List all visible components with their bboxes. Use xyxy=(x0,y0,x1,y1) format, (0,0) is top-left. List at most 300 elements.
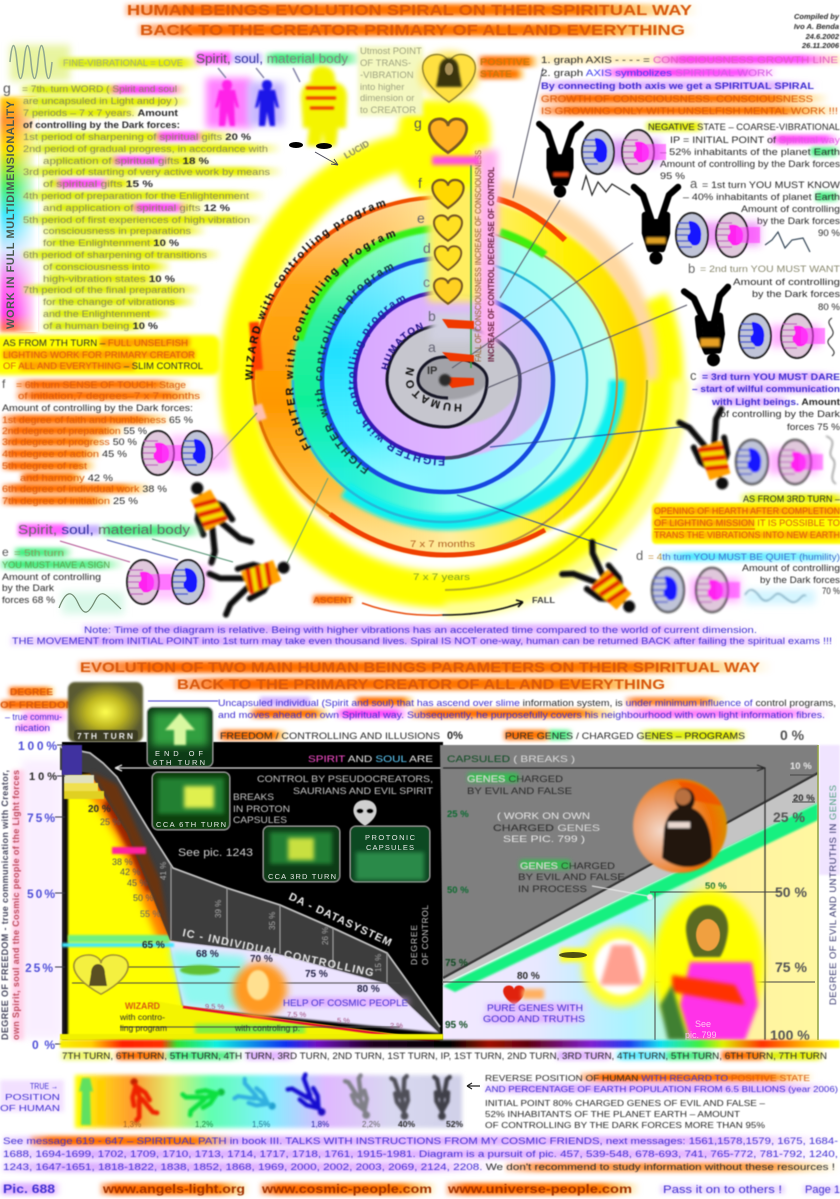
negative state text: – 52% inhabitants of the planet Earth xyxy=(660,147,840,158)
ring band f xyxy=(253,197,647,555)
utmost point text: OF TRANS- xyxy=(360,58,411,69)
upright rainbow figure xyxy=(79,1078,105,1125)
ring glow d xyxy=(345,380,617,522)
turn f text: of initiation,7 degrees–7 x 7 months xyxy=(18,391,200,402)
uncapsuled text: Uncapsuled individual (Spirit and soul) that has ascend over slime information system, is under minimum influence of control programs, xyxy=(218,698,836,709)
vertical freedom axis text: DEGREE OF FREEDOM - true communication with Creator, xyxy=(0,770,10,1040)
orange gradient edge xyxy=(90,775,170,940)
orange left band xyxy=(273,212,445,538)
turn f text: 7th degree of initiation 25 % xyxy=(2,496,139,507)
cyan glow xyxy=(170,950,245,1010)
utmost point text: into higher xyxy=(360,82,404,93)
woman portrait: See xyxy=(695,1019,711,1029)
dark datasystem band xyxy=(60,747,440,1033)
individual controlling label: IC - INDIVIDUAL CONTROLLING xyxy=(181,927,375,979)
wave e xyxy=(59,592,124,614)
periods text block g: are uncapsuled in Light and joy ) xyxy=(23,96,178,107)
turn c text: – start of wilful communication xyxy=(692,384,840,395)
messages paragraph: 1688, 1694-1699, 1702, 1709, 1710, 1713, 1714, 1717, 1718, 1761, 1915-1981. Diagram is a pursuit of pic. 457, 539-548, 678-693, 741, 765-772, 781-792, 1240, xyxy=(3,1149,838,1160)
left chart: black panel xyxy=(22,707,443,1042)
turn f text: 4th degree of action 45 % xyxy=(2,449,128,460)
chart percent labels xyxy=(445,761,815,1043)
positive state label: POSITIVE xyxy=(480,57,530,68)
negative state text: 95 % xyxy=(660,171,686,182)
reverse position text xyxy=(485,1073,838,1130)
dark red edge xyxy=(108,800,152,890)
title xyxy=(125,2,700,39)
curve percent labels: 55 % xyxy=(140,909,161,919)
band brown overlay xyxy=(92,772,170,938)
reverse position text: REVERSE POSITION OF HUMAN WITH REGARD TO POSITIVE STATE xyxy=(485,1073,810,1083)
turn d text: = 4th turn YOU MUST BE QUIET (humility) xyxy=(648,552,840,563)
degree of control label: OF CONTROL xyxy=(420,905,430,965)
right tick axis xyxy=(817,745,819,1040)
freedom and pure genes header: 0 % xyxy=(780,727,805,743)
figure d falling xyxy=(562,542,815,627)
label pointer lines xyxy=(218,68,300,82)
periods text block g: 7th period of the final preparation xyxy=(23,285,185,296)
photo: end of 6th turn: 6TH TURN xyxy=(153,758,205,767)
freedom and pure genes header: FREEDOM / CONTROLLING AND ILLUSIONS xyxy=(220,731,440,742)
chart percent labels: 100 % xyxy=(770,1027,810,1043)
turn a text: Amount of controlling xyxy=(741,204,840,215)
positive state label xyxy=(478,56,540,80)
curve percent labels: 50 % xyxy=(133,893,154,903)
ufo and angel xyxy=(559,927,658,1007)
turn d text: d xyxy=(636,548,643,563)
curve percent labels xyxy=(88,804,380,995)
turn letters xyxy=(342,115,476,582)
ascent fall arrow: FALL xyxy=(532,595,555,605)
chart percent labels: 75 % xyxy=(775,959,807,975)
uncapsuled text: and moves ahead on own Spiritual way. Subsequently, he purposefully covers his neighbourhood with own light information fibres. xyxy=(218,710,825,721)
pointer lines e xyxy=(60,539,233,562)
periods text block g: of consciousness into xyxy=(43,262,150,273)
author credit xyxy=(794,12,840,50)
figure b upside down xyxy=(684,287,834,369)
turn f text: f xyxy=(2,377,6,391)
magenta spirit body xyxy=(206,78,251,128)
chart percent labels: 75 % xyxy=(445,958,468,969)
periods text block g: 7 periods – 7 x 7 years. Amount xyxy=(23,108,179,119)
striped percent block xyxy=(64,775,104,799)
spirit and soul label: SPIRIT AND SOUL ARE xyxy=(308,754,433,765)
spiral lines xyxy=(293,228,647,590)
band percent labels: 15 % xyxy=(374,954,383,972)
turn e text: YOU MUST HAVE A SIGN xyxy=(2,560,110,571)
right axis notes xyxy=(540,55,840,117)
band percent labels: 41 % xyxy=(159,862,168,880)
as from 3rd turn callout: OF LIGHTING MISSION IT IS POSSIBLE TO xyxy=(654,518,840,529)
population percentages: 1,3% xyxy=(123,1120,141,1129)
chart percent labels: 10 % xyxy=(790,761,812,772)
silver stripe xyxy=(443,773,818,984)
uncapsuled text xyxy=(148,697,836,721)
turn letters: 7 x 7 months xyxy=(410,539,476,549)
curved ring labels: FIGHTER with controlling program xyxy=(284,230,396,452)
periods text block g: for the change of vibrations xyxy=(43,297,175,308)
genes charged block: GENES CHARGED xyxy=(520,861,615,872)
help of cosmic people: HELP OF COSMIC PEOPLE xyxy=(283,998,408,1009)
genes charged block: SEE PIC. 799 ) xyxy=(503,834,585,845)
wizard label: 9,5 % xyxy=(205,1002,225,1011)
periods text block g: 4th period of preparation for the Enlightenment xyxy=(23,191,249,202)
blue soul body xyxy=(248,80,284,126)
messages paragraph xyxy=(2,1136,840,1173)
photo: protonic capsules xyxy=(350,826,430,882)
dark centre xyxy=(439,374,451,386)
vertical axis text xyxy=(471,150,496,368)
chart percent labels: 50 % xyxy=(447,885,469,896)
woman portrait xyxy=(652,890,764,1040)
reverse position text: AND PERCENTAGE OF EARTH POPULATION FROM 6.5 BILLIONS (year 2006) xyxy=(485,1084,838,1094)
ring band b xyxy=(387,325,520,427)
left axis labels: 10% xyxy=(29,771,57,783)
wizard label: with controling p. xyxy=(234,1023,300,1033)
turn letters: g xyxy=(414,115,422,131)
reverse position text: INITIAL POINT 80% CHARGED GENES OF EVIL AND FALSE – xyxy=(485,1098,765,1108)
cyan lilac window xyxy=(168,940,440,1033)
negative state text: IP = INITIAL POINT of Spiritual way xyxy=(670,135,840,146)
photo: end of 6th turn: END OF xyxy=(155,749,203,758)
negative state text xyxy=(645,122,840,182)
footer: Pass it on to others ! xyxy=(663,1184,782,1196)
green band xyxy=(443,803,818,992)
turn b text: by the Dark forces xyxy=(752,289,840,300)
see pic label: See pic. 1243 xyxy=(178,847,253,859)
right axis notes: GROWTH OF CONSCIOUSNESS. CONSCIOUSNESS xyxy=(541,94,813,105)
curve percent labels: 20 % xyxy=(88,804,111,815)
turn f text: Amount of controlling by the Dark forces: xyxy=(2,403,193,414)
turn f text: and harmony 42 % xyxy=(20,473,114,484)
ring band e xyxy=(293,228,617,522)
pure genes xyxy=(482,986,590,1025)
degree of freedom label xyxy=(0,687,82,734)
chart percent labels: 95 % xyxy=(445,1020,468,1031)
author credit: 26.11.2006 xyxy=(801,41,840,50)
author credit: 24.6.2002 xyxy=(805,32,840,41)
as from 7th turn callout xyxy=(0,335,220,375)
photo: cca 6th turn xyxy=(152,772,230,830)
turn letters: d xyxy=(423,240,431,256)
periods text block g: 6th period of sharpening of transitions xyxy=(23,250,207,261)
turn b text: = 2nd turn YOU MUST WANT xyxy=(700,264,840,275)
true position of human label: OF HUMAN xyxy=(0,1103,60,1113)
love wave xyxy=(10,45,70,81)
degree of control label: DEGREE xyxy=(409,925,419,965)
author credit: Compiled by xyxy=(794,12,840,21)
curve percent labels: 65 % xyxy=(142,940,165,951)
population figures xyxy=(123,1075,450,1122)
top body figures panel xyxy=(10,45,365,149)
band percent labels xyxy=(159,862,383,972)
section 2 title: BACK TO THE PRIMARY CREATOR OF ALL AND EVERYTHING xyxy=(177,676,665,692)
turn e text: = 5th turn xyxy=(14,548,64,559)
turn c text: c xyxy=(690,368,697,383)
turn c text: with Light beings. Amount xyxy=(711,397,840,408)
band separators xyxy=(171,866,387,984)
curve percent labels: 25 % xyxy=(100,817,121,827)
turn a text xyxy=(683,176,840,239)
cosmic ship xyxy=(180,965,220,975)
turn b text: Amount of controlling xyxy=(733,277,840,288)
turn e text: e xyxy=(2,545,9,559)
periods text block g: 2nd period of gradual progress, in accordance with xyxy=(23,144,268,155)
photo: protonic capsules: CAPSULES xyxy=(366,843,414,852)
pure genes: PURE GENES WITH xyxy=(487,1003,583,1014)
chart percent labels: 50 % xyxy=(705,881,727,892)
population percentages: 2,2% xyxy=(362,1120,380,1129)
periods text block g: and application of spiritual gifts 12 % xyxy=(43,203,231,214)
degree of freedom label: OF FREEDOM xyxy=(0,700,75,711)
turn letters: a xyxy=(428,339,436,355)
turn pink marker xyxy=(432,156,480,165)
turn a text: by the Dark forces xyxy=(757,216,840,227)
photo: cca 3rd turn xyxy=(263,826,340,882)
turn b text xyxy=(688,261,840,313)
turn letters: 7 x 7 years xyxy=(413,572,471,582)
vertical work label: WORK IN FULL MULTIDIMENSIONALITY xyxy=(5,100,17,329)
left axis labels: 75% xyxy=(27,811,55,825)
utmost point text: to CREATOR xyxy=(360,105,416,116)
spirit ovals e xyxy=(127,560,210,604)
alien head icon xyxy=(353,800,377,826)
red lower line xyxy=(183,1007,440,1042)
vertical axis text: INCREASE OF CONTROL DECREASE OF CONTROL xyxy=(487,167,496,362)
periods text block g: of a human being 10 % xyxy=(43,321,159,332)
turn letters: b xyxy=(428,308,436,324)
breaks label: BREAKS xyxy=(233,792,274,803)
chart percent labels: 80 % xyxy=(517,971,540,982)
freedom and pure genes header xyxy=(218,727,805,743)
right axis notes: 2. graph AXIS symbolizes SPIRITUAL WORK xyxy=(541,68,774,79)
figure c upside down xyxy=(679,409,836,496)
curve percent labels: 45 % xyxy=(127,878,148,888)
outer pale glow turn xyxy=(445,380,680,610)
chart percent labels: 50 % xyxy=(775,884,807,900)
negative state text: Amount of controlling by the Dark forces xyxy=(660,159,840,170)
right axis notes: IS GROWING ONLY WITH UNSELFISH MENTAL WORK !!! xyxy=(541,106,838,117)
curve percent labels: 38 % xyxy=(112,857,133,867)
chart percent labels: 25 % xyxy=(773,809,805,825)
curved ring labels xyxy=(244,200,462,475)
right strip tint xyxy=(819,745,840,875)
ring band d xyxy=(322,258,587,492)
turn b text: 80 % xyxy=(818,302,840,313)
photo: 7th turn: 7TH TURN xyxy=(77,731,133,741)
note text: Note: Time of the diagram is relative. Being with higher vibrations has an accelerated time compared to the world of current dimension. xyxy=(84,625,757,636)
hearts column xyxy=(429,119,467,304)
spirit and soul label: CONTROL BY PSEUDOCREATORS, xyxy=(257,774,433,785)
green lower glow xyxy=(195,1024,305,1034)
messages paragraph: See message 619 - 647 – SPIRITUAL PATH in book III. TALKS WITH INSTRUCTIONS FROM MY COSMIC FRIENDS, next messages: 1561,1578,1579, 1675, 1684- xyxy=(3,1136,838,1147)
central column glow xyxy=(398,100,498,345)
lucid arrow xyxy=(315,152,338,165)
photo: protonic capsules: PROTONIC xyxy=(365,833,416,842)
photo: cca 3rd turn: CCA 3RD TURN xyxy=(268,872,336,881)
population percentages: 40% xyxy=(398,1119,415,1129)
periods text block g: 1st period of sharpening of spiritual gifts 20 % xyxy=(23,132,252,143)
turn f text: = 6th turn SENSE OF TOUCH: Stage xyxy=(16,380,186,391)
breaks label: CAPSULES xyxy=(233,815,287,826)
black ground xyxy=(62,742,443,1040)
gray charged area xyxy=(440,745,818,978)
periods text block g: of controlling by the Dark forces: xyxy=(23,120,180,131)
capsule line xyxy=(72,765,443,1027)
genes charged block xyxy=(467,773,653,900)
positive state label: STATE xyxy=(480,69,512,80)
wizard label: WIZARD xyxy=(125,1001,160,1012)
population percentages: 1,8% xyxy=(311,1120,329,1129)
figure IP upside down xyxy=(539,124,666,198)
utmost point text: Utmost POINT xyxy=(360,46,422,57)
red arrows xyxy=(442,319,474,388)
utmost point text: dimension or xyxy=(360,93,414,104)
periods text block g xyxy=(3,80,284,332)
periods text block g: 3rd period of starting of very active work by means xyxy=(23,167,270,178)
utmost point text xyxy=(358,46,423,116)
turn b text: b xyxy=(688,261,695,276)
turn c text: of controlling by the Dark xyxy=(720,409,840,420)
cyan left band xyxy=(326,280,419,485)
vertical freedom axis text xyxy=(0,770,24,1040)
yellow freedom area xyxy=(68,775,183,1040)
utmost point text: -VIBRATION xyxy=(360,70,414,81)
curved ring labels: HUMATON xyxy=(404,366,462,412)
turn e text: forces 68 % xyxy=(2,595,56,606)
freedom and pure genes header: PURE GENES / CHARGED GENES – PROGRAMS xyxy=(505,731,745,742)
spirit ovals f xyxy=(142,431,230,475)
vertical evil axis label: DEGREE OF EVIL AND UNTRUTHS IN GENES xyxy=(828,785,839,1005)
spirit and soul label: SAURIANS AND EVIL SPIRIT xyxy=(293,786,433,797)
as from 7th turn callout: AS FROM 7TH TURN – FULL UNSELFISH xyxy=(3,338,188,349)
curve percent labels: 68 % xyxy=(196,949,219,960)
band percent labels: 35 % xyxy=(268,912,277,930)
turn letters: e xyxy=(417,210,425,226)
turn d text xyxy=(636,548,840,597)
blue corner block xyxy=(62,745,82,775)
periods text block g: high-vibration states 10 % xyxy=(43,274,176,285)
degree of freedom label: – true commu- xyxy=(5,712,62,723)
vertical work label xyxy=(0,97,38,332)
turn f text: 1st degree of faith and humbleness 65 % xyxy=(2,415,194,426)
turn f text xyxy=(2,377,206,507)
wizard label: ling program xyxy=(120,1023,167,1033)
turn c text: forces 75 % xyxy=(787,422,840,433)
yellow material body xyxy=(289,66,347,149)
photo: end of 6th turn xyxy=(147,707,213,767)
degree of freedom label: DEGREE xyxy=(10,687,53,698)
dark edge line xyxy=(443,773,818,978)
figure a upside down xyxy=(634,187,810,264)
periods text block g: 5th period of first experiences of high vibration xyxy=(23,215,250,226)
freedom and pure genes header: 0% xyxy=(447,730,463,742)
walking figure f xyxy=(175,472,251,563)
wizard label: 7,5 % xyxy=(287,1010,307,1019)
band percent labels: 26 % xyxy=(321,927,330,945)
turn e text: by the Dark xyxy=(2,583,54,594)
turn c text: = 3rd turn YOU MUST DARE xyxy=(702,372,840,383)
ring glow f xyxy=(497,190,648,380)
right axis notes: By connecting both axis we get a SPIRITUAL SPIRAL xyxy=(541,81,814,92)
periods text block g: = 7th. turn WORD ( Spirit and soul xyxy=(22,84,177,95)
orange-red arc xyxy=(253,197,565,555)
genes charged block: BY EVIL AND FALSE xyxy=(467,786,572,797)
curve percent labels: 80 % xyxy=(357,984,380,995)
turn e text: Amount of controlling xyxy=(2,572,101,583)
capsuled label: CAPSULED ( BREAKS ) xyxy=(447,754,575,765)
note text xyxy=(10,624,835,647)
second spirit soul body heading: Spirit, soul, material body xyxy=(18,522,191,537)
left axis labels: 25% xyxy=(25,961,53,975)
yellow lower wedge xyxy=(150,1000,440,1040)
left axis labels: 100% xyxy=(18,739,57,753)
reverse position text: OF CONTROLLING BY THE DARK FORCES MORE THAN 95% xyxy=(485,1120,765,1130)
wizard label xyxy=(119,1001,403,1033)
datasystem label: DA - DATASYSTEM xyxy=(287,891,393,949)
footer: www.universe-people.com xyxy=(447,1182,632,1196)
turn a text: = 1st turn YOU MUST KNOW xyxy=(702,180,840,191)
true position of human label xyxy=(0,1080,64,1113)
section 2 title xyxy=(78,659,773,692)
chart percent labels: 20 % xyxy=(793,793,815,804)
curve percent labels: 75 % xyxy=(305,969,328,980)
spirit and soul label xyxy=(257,754,433,797)
curved ring labels: HUMATON xyxy=(380,322,424,370)
photo: cca 6th turn: CCA 6TH TURN xyxy=(156,820,226,829)
arrow line xyxy=(443,765,765,1040)
lying figure e xyxy=(210,545,297,615)
periods text block g: g xyxy=(3,80,11,96)
curved ring labels: FIGHTER with controlling program xyxy=(314,264,394,475)
turn d text: by the Dark forces xyxy=(760,575,840,586)
fine vibration label: FINE-VIBRATIONAL = LOVE xyxy=(63,58,183,69)
wizard label: 5 % xyxy=(337,1016,350,1025)
curve percent labels: 70 % xyxy=(250,954,273,965)
turn letters: c xyxy=(423,274,430,290)
author credit: Ivo A. Benda xyxy=(794,22,839,31)
circle photo xyxy=(633,779,727,873)
woman portrait: pic. 799 xyxy=(685,1030,717,1040)
turn a text: a xyxy=(690,176,698,191)
turn letters: IP xyxy=(427,365,437,377)
genes charged block: GENES CHARGED xyxy=(467,774,563,785)
footer: www.cosmic-people.com xyxy=(261,1182,432,1196)
periods text block g: consciousness in preparations xyxy=(43,226,191,237)
horizontal level lines xyxy=(443,775,815,1040)
curve percent labels: 42 % xyxy=(120,867,141,877)
turn letters: f xyxy=(418,175,422,191)
turn a text: – 40% inhabitants of planet Earth xyxy=(683,192,840,203)
true position of human label: POSITION xyxy=(5,1092,60,1102)
as from 7th turn callout: OF ALL AND EVERYTHING – SLIM CONTROL xyxy=(3,361,203,372)
as from 3rd turn callout xyxy=(652,494,840,544)
title: BACK TO THE CREATOR PRIMARY OF ALL AND EVERYTHING xyxy=(140,22,685,39)
population percentages xyxy=(123,1119,463,1129)
curved ring labels: WIZARD with controlling program xyxy=(244,200,386,380)
pointer lines xyxy=(213,68,690,563)
left axis labels: 0 % xyxy=(32,1038,55,1052)
turn f text: 6th degree of individual work 38 % xyxy=(2,484,168,495)
ring band c xyxy=(355,292,553,458)
ascent fall arrow: ASCENT xyxy=(313,595,354,605)
band percent labels: 39 % xyxy=(214,900,223,918)
photo: 7th turn xyxy=(68,682,143,742)
reverse position text: 52% INHABITANTS OF THE PLANET EARTH – AMOUNT xyxy=(485,1109,740,1119)
turn f text: 2nd degree of preparation 55 % xyxy=(2,426,148,437)
ring band a xyxy=(418,357,487,400)
magenta marker xyxy=(112,847,146,854)
